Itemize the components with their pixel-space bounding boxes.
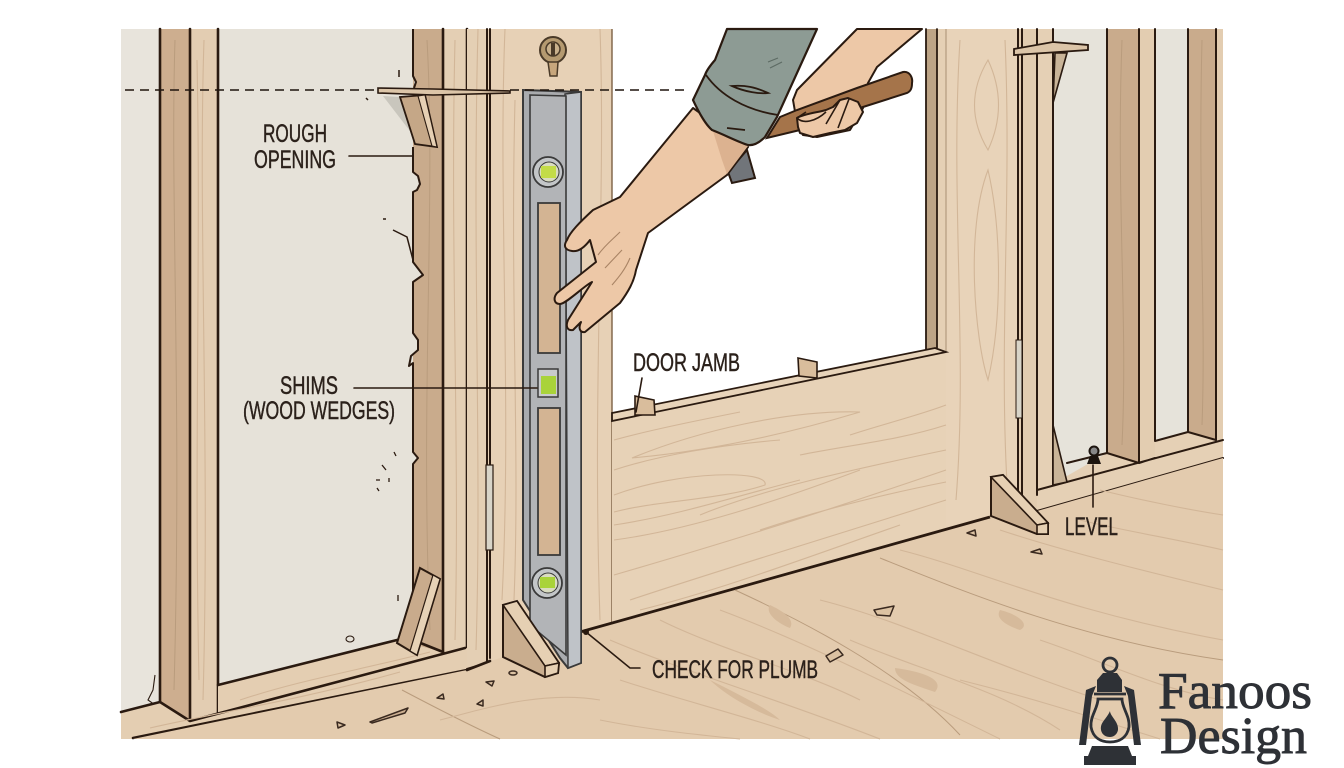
dashed reference line [125,89,690,91]
lower forearm and hand on level [555,108,748,332]
shims on window sill [635,358,817,415]
window opening [612,29,946,630]
label: check for plumb: CHECK FOR PLUMB [652,656,818,684]
rough opening torn drywall edge [409,29,423,640]
forearm shadow near cuff [712,128,748,174]
plywood floor [133,458,1223,739]
wordmark [1158,663,1312,765]
label: shims [243,372,537,425]
wordmark: Fanoos [1158,663,1312,720]
top vial [533,157,563,187]
shim wedge: bottom left leaning [397,568,440,655]
hammer head [728,150,755,183]
hammer handle [767,72,912,138]
bottom plate left [121,640,467,739]
right door post [937,29,1018,545]
label: rough opening [254,120,412,174]
label: rough opening: OPENING [254,146,336,174]
label: level [1065,446,1118,541]
logo: Fanoos Design [1079,658,1312,765]
hand creases [598,232,630,285]
label: rough opening: ROUGH [263,120,327,148]
corner wedge at right post [991,475,1048,534]
arm holding hammer [555,29,922,332]
gripping fingers [797,98,863,137]
rolled sleeve [693,29,817,145]
label: shims: (WOOD WEDGES) [243,397,395,425]
left framing studs [148,29,467,721]
label: check for plumb [583,629,818,684]
label: door jamb [633,349,740,412]
top bracket shim [378,88,510,147]
label: level: LEVEL [1065,513,1118,541]
middle vial [538,369,558,397]
wordmark: Design [1160,708,1307,765]
right framing studs and plate [1016,29,1223,519]
wood chips on floor [337,530,1042,728]
upper arm and fist [793,29,922,137]
right top bracket shim [1014,42,1088,485]
door jamb post and stud [467,29,612,675]
door lock cylinder [540,37,566,76]
back wall: drywall surfaces [121,29,1189,719]
corner wedge at level base [503,601,559,677]
lower wood panel [612,348,946,630]
icon: lantern [1079,658,1141,765]
label: shims: SHIMS [280,372,338,400]
label: door jamb: DOOR JAMB [633,349,740,377]
bottom vial [532,568,562,598]
level tool [523,90,581,668]
